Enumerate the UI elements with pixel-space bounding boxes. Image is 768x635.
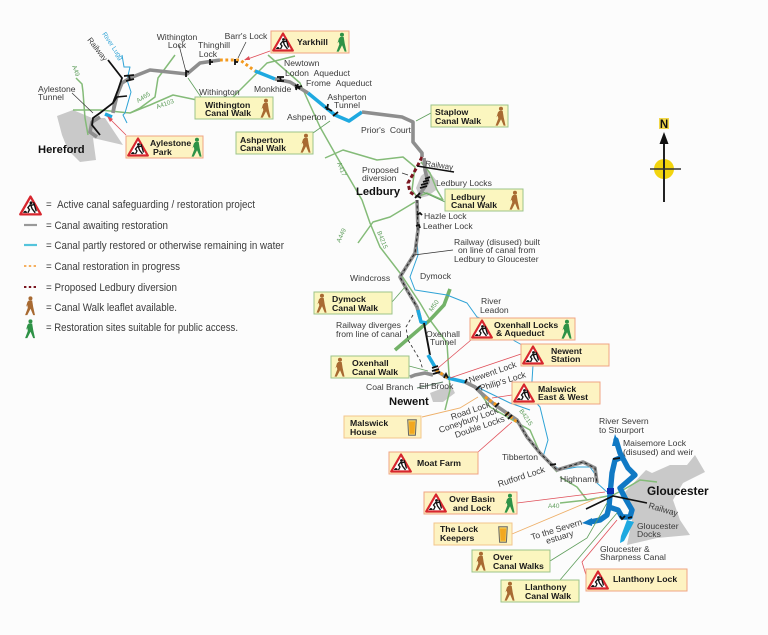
place names and map labels: Windcross bbox=[350, 273, 390, 283]
River Severn channels bbox=[582, 434, 635, 543]
legend: = Canal Walk leaflet available. bbox=[46, 302, 177, 314]
place names and map labels: Ashperton bbox=[287, 112, 326, 122]
callout: Ledbury Canal Walk bbox=[445, 189, 523, 211]
legend: = Canal restoration in progress bbox=[46, 261, 180, 273]
legend: active project icon bbox=[20, 197, 41, 214]
place names and map labels: Coal Branch bbox=[366, 382, 414, 392]
callout: Oxenhall Canal Walk: Canal Walk bbox=[352, 367, 398, 377]
place names and map labels: Hereford bbox=[38, 144, 85, 156]
callout: Over Basin and Lock: and Lock bbox=[453, 503, 491, 513]
callout: Oxenhall Locks and Aqueduct: Oxenhall Locks bbox=[494, 320, 558, 330]
callout: Malswick House: Malswick bbox=[350, 418, 388, 428]
place names and map labels: Double Locks bbox=[453, 413, 506, 440]
place names and map labels: Newtown bbox=[284, 58, 320, 68]
callout: Malswick East and West bbox=[512, 382, 600, 404]
place names and map labels: A40 bbox=[548, 503, 560, 510]
place names and map labels: River Severn bbox=[599, 416, 649, 426]
place names and map labels: Prior's Court bbox=[361, 125, 411, 135]
place names and map labels: Tunnel bbox=[334, 100, 360, 110]
place names and map labels: Lodon Aqueduct bbox=[285, 68, 351, 78]
place names and map labels bbox=[38, 31, 709, 562]
place names and map labels: River Lugg bbox=[100, 31, 124, 62]
callout: Aylestone Park: Aylestone bbox=[150, 138, 191, 148]
leader lines bbox=[72, 42, 617, 580]
town area: Newent bbox=[430, 387, 455, 402]
town area: Gloucester bbox=[625, 455, 705, 545]
compass bbox=[650, 118, 681, 202]
callout: Dymock Canal Walk: Dymock bbox=[332, 294, 366, 304]
canal line bbox=[90, 60, 597, 483]
compass: N bbox=[660, 119, 668, 131]
callout: Withington Canal Walk: Withington bbox=[205, 100, 250, 110]
callout: Malswick House bbox=[344, 416, 421, 438]
callout: Over Canal Walks: Canal Walks bbox=[493, 561, 544, 571]
place names and map labels: A449 bbox=[335, 227, 348, 244]
callout: Staplow Canal Walk: Canal Walk bbox=[435, 116, 481, 126]
place names and map labels: Railway bbox=[85, 36, 109, 63]
callout: Withington Canal Walk bbox=[195, 97, 273, 119]
legend: = Canal awaiting restoration bbox=[46, 220, 168, 232]
place names and map labels: Barr's Lock bbox=[225, 31, 268, 41]
callout: The Lock Keepers: Keepers bbox=[440, 533, 474, 543]
callout: Staplow Canal Walk: Staplow bbox=[435, 107, 469, 117]
place names and map labels: Frome Aqueduct bbox=[306, 78, 373, 88]
callout: Staplow Canal Walk bbox=[431, 105, 508, 127]
place names and map labels: Ledbury bbox=[356, 186, 401, 198]
callout: The Lock Keepers bbox=[434, 523, 512, 545]
legend: = Restoration sites suitable for public access. bbox=[46, 322, 238, 334]
callout: Ashperton Canal Walk: Ashperton bbox=[240, 135, 283, 145]
place names and map labels: Tunnel bbox=[38, 92, 64, 102]
callout: Aylestone Park: Park bbox=[153, 147, 172, 157]
legend: = Proposed Ledbury diversion bbox=[46, 282, 177, 294]
callout: Ashperton Canal Walk bbox=[236, 132, 313, 154]
callout: Ledbury Canal Walk: Ledbury bbox=[451, 192, 485, 202]
callout: Oxenhall Locks and Aqueduct: & Aqueduct bbox=[496, 328, 545, 338]
callout: Oxenhall Canal Walk: Oxenhall bbox=[352, 358, 389, 368]
callout: Newent Station: Station bbox=[551, 354, 580, 364]
callout: The Lock Keepers: The Lock bbox=[440, 524, 478, 534]
place names and map labels: Newent Lock bbox=[467, 359, 518, 385]
place names and map labels: Sharpness Canal bbox=[600, 552, 666, 562]
callout: Over Basin and Lock: Over Basin bbox=[449, 494, 495, 504]
place names and map labels: Newent bbox=[389, 396, 429, 408]
place names and map labels: Tunnel bbox=[430, 337, 456, 347]
callout: Llanthony Canal Walk bbox=[501, 580, 579, 602]
callout: Over Canal Walks: Over bbox=[493, 552, 513, 562]
place names and map labels: A417 bbox=[335, 161, 347, 178]
place names and map labels: Dymock bbox=[420, 271, 452, 281]
place names and map labels: Philip's Lock bbox=[479, 369, 528, 393]
place names and map labels: Oxenhall bbox=[426, 329, 460, 339]
place names and map labels: to Stourport bbox=[599, 425, 645, 435]
callout: Over Basin and Lock bbox=[424, 492, 517, 514]
roads bbox=[73, 55, 657, 503]
place names and map labels: Proposed bbox=[362, 165, 399, 175]
callout: Newent Station: Newent bbox=[551, 346, 582, 356]
place names and map labels: B4215 bbox=[517, 408, 534, 428]
callout: Ledbury Canal Walk: Canal Walk bbox=[451, 200, 497, 210]
legend: = Canal partly restored or otherwise remaining in water bbox=[46, 240, 284, 252]
town area: Hereford bbox=[57, 110, 123, 162]
place names and map labels: Road Lock bbox=[449, 399, 492, 422]
callout: Malswick East and West: East & West bbox=[538, 392, 588, 402]
place names and map labels: A465 bbox=[135, 91, 152, 105]
place names and map labels: Gloucester bbox=[647, 484, 709, 498]
place names and map labels: Railway (disused) built bbox=[454, 237, 541, 247]
place names and map labels: A4103 bbox=[155, 98, 175, 111]
town area: Ledbury bbox=[416, 170, 436, 198]
place names and map labels: Railway bbox=[425, 159, 454, 172]
place names and map labels: Ashperton bbox=[327, 92, 367, 102]
place names and map labels: Gloucester bbox=[637, 521, 679, 531]
rivers bbox=[122, 55, 607, 492]
place names and map labels: Ell Brook bbox=[419, 381, 454, 391]
callout: Llanthony Lock bbox=[586, 569, 687, 591]
place names and map labels: Coneybury Lock bbox=[437, 405, 500, 435]
callout: Ashperton Canal Walk: Canal Walk bbox=[240, 143, 286, 153]
place names and map labels: Tibberton bbox=[502, 452, 538, 462]
place names and map labels: Hazle Lock bbox=[424, 211, 467, 221]
place names and map labels: diversion bbox=[362, 173, 397, 183]
place names and map labels: Rutford Lock bbox=[497, 464, 547, 489]
place names and map labels: Lock bbox=[168, 40, 187, 50]
callout: Yarkhill bbox=[271, 31, 349, 53]
callout: Dymock Canal Walk bbox=[314, 292, 392, 314]
legend bbox=[20, 197, 284, 338]
callout: Over Canal Walks bbox=[472, 550, 550, 572]
place names and map labels: (disused) and weir bbox=[623, 447, 693, 457]
place names and map labels: Monkhide bbox=[254, 84, 291, 94]
place names and map labels: Lock bbox=[199, 49, 218, 59]
callout: Llanthony Lock: Llanthony Lock bbox=[613, 574, 677, 584]
place names and map labels: To the Severn bbox=[530, 517, 584, 542]
callout: Withington Canal Walk: Canal Walk bbox=[205, 108, 251, 118]
callout: Oxenhall Locks and Aqueduct bbox=[470, 318, 575, 340]
place names and map labels: Railway bbox=[647, 500, 680, 518]
place names and map labels: Gloucester & bbox=[600, 544, 650, 554]
place names and map labels: River bbox=[481, 296, 501, 306]
callout: Oxenhall Canal Walk bbox=[331, 356, 409, 378]
callout: Dymock Canal Walk: Canal Walk bbox=[332, 303, 378, 313]
place names and map labels: estuary bbox=[545, 528, 575, 546]
place names and map labels: on line of canal from bbox=[458, 245, 535, 255]
place names and map labels: Leather Lock bbox=[423, 221, 473, 231]
place names and map labels: Docks bbox=[637, 529, 661, 539]
place names and map labels: Railway diverges bbox=[336, 320, 401, 330]
callout: Llanthony Canal Walk: Llanthony bbox=[525, 582, 567, 592]
place names and map labels: from line of canal bbox=[336, 329, 402, 339]
callout: Malswick House: House bbox=[350, 427, 377, 437]
place names and map labels: Leadon bbox=[480, 305, 509, 315]
place names and map labels: Highnam bbox=[560, 474, 594, 484]
callout: Newent Station bbox=[521, 344, 609, 366]
callout: Moat Farm: Moat Farm bbox=[417, 458, 461, 468]
place names and map labels: B4215 bbox=[375, 230, 389, 250]
place names and map labels: M50 bbox=[428, 299, 441, 313]
place names and map labels: Ledbury to Gloucester bbox=[454, 254, 539, 264]
place names and map labels: Ledbury Locks bbox=[436, 178, 492, 188]
callout: Yarkhill: Yarkhill bbox=[297, 37, 328, 47]
callout: Aylestone Park bbox=[126, 136, 203, 158]
place names and map labels: Withington bbox=[157, 32, 198, 42]
place names and map labels: Maisemore Lock bbox=[623, 438, 687, 448]
legend: = Active canal safeguarding / restoration project bbox=[46, 199, 255, 211]
place names and map labels: Withington bbox=[199, 87, 240, 97]
place names and map labels: A49 bbox=[70, 64, 81, 78]
railways bbox=[92, 60, 647, 509]
locks bbox=[124, 59, 632, 519]
callout: Malswick East and West: Malswick bbox=[538, 384, 576, 394]
place names and map labels: Thinghill bbox=[198, 40, 230, 50]
callout: Moat Farm bbox=[389, 452, 478, 474]
place names and map labels: Aylestone bbox=[38, 84, 76, 94]
callout: Llanthony Canal Walk: Canal Walk bbox=[525, 591, 571, 601]
